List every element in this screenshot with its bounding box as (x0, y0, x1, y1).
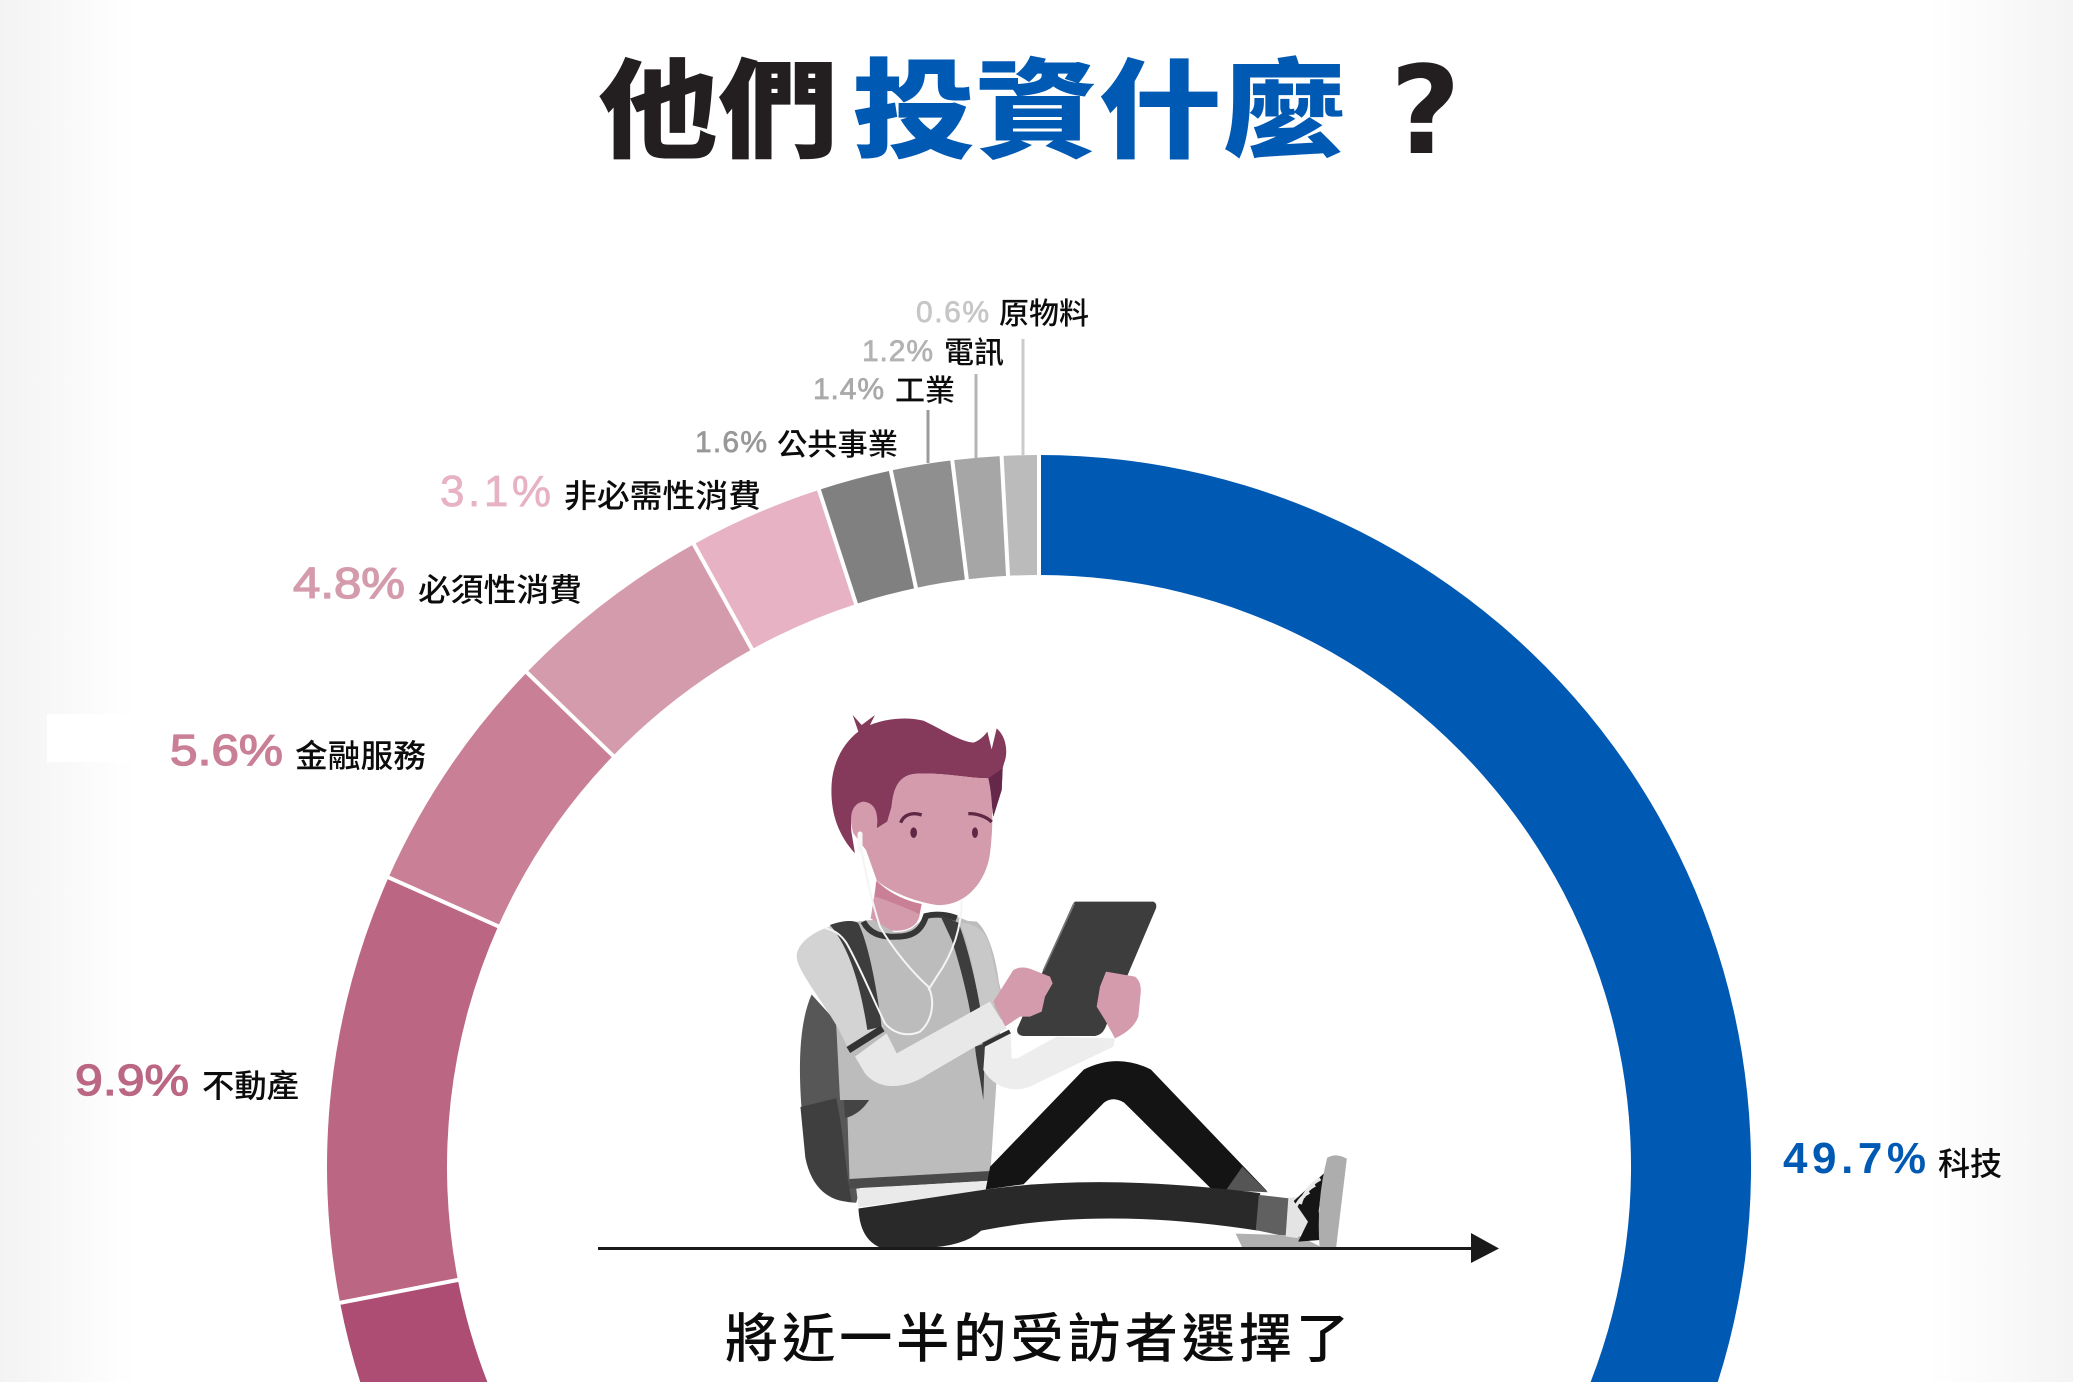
segment: industrials 1.4% (891, 460, 967, 588)
illustration: student with tablet (797, 715, 1347, 1248)
shoe (1236, 1155, 1347, 1248)
label: consumer staples 4.8% (293, 559, 582, 608)
title: ? (1390, 40, 1461, 182)
right arm (983, 1032, 1115, 1089)
segment: real estate 9.9% (327, 877, 498, 1303)
lower body (800, 917, 1347, 1248)
label: materials 0.6% (916, 296, 1089, 331)
title (598, 40, 1461, 182)
hands (993, 967, 1141, 1038)
hair (831, 715, 1006, 853)
label: financials 5.6% (170, 726, 426, 775)
arrow (598, 1233, 1499, 1263)
label: real estate 9.9% (75, 1056, 299, 1105)
leader lines (928, 339, 1023, 463)
donut chart (327, 452, 1751, 1382)
segment: consumer discretionary 3.1% (694, 490, 856, 649)
label: materials 0.6%: 原物料 (999, 298, 1089, 331)
label: industrials 1.4% (813, 373, 955, 408)
left forearm (855, 1002, 1007, 1086)
label: telecom 1.2%: 1.2% (862, 335, 933, 368)
earphones (825, 834, 962, 1034)
label: industrials 1.4%: 工業 (895, 375, 955, 408)
label: technology 49.7%: 49.7% (1783, 1134, 1926, 1183)
label: financials 5.6%: 5.6% (170, 726, 283, 775)
shirt lower (829, 917, 1001, 1181)
left sleeve (797, 927, 883, 1050)
label: consumer staples 4.8%: 4.8% (293, 559, 405, 608)
title: 他們 (598, 51, 838, 172)
segment: telecom 1.2% (952, 456, 1008, 579)
label: consumer discretionary 3.1% (440, 467, 761, 516)
right shoulder (960, 923, 1002, 1017)
label: utilities 1.6% (695, 426, 898, 462)
label: telecom 1.2% (862, 335, 1004, 370)
shirt upper (830, 917, 1003, 1100)
segment: materials 0.6% (1002, 455, 1039, 576)
label: industrials 1.4%: 1.4% (813, 373, 884, 406)
label: utilities 1.6%: 1.6% (695, 426, 767, 459)
back leg (986, 1061, 1268, 1192)
backpack (800, 994, 887, 1203)
segment: technology 49.7% (1039, 455, 1751, 1382)
label: consumer staples 4.8%: 必須性消費 (418, 572, 582, 608)
label: technology 49.7% (1783, 1134, 2002, 1183)
sleeve band (848, 1028, 883, 1050)
neck (871, 880, 922, 931)
label: consumer discretionary 3.1%: 非必需性消費 (564, 478, 761, 514)
label: consumer discretionary 3.1%: 3.1% (440, 467, 551, 516)
face (851, 774, 992, 905)
backpack straps (830, 915, 985, 1100)
eyes and brows (901, 814, 992, 838)
hem and undershirt (850, 1171, 990, 1207)
label: telecom 1.2%: 電訊 (944, 337, 1004, 370)
segment: financials 5.6% (389, 672, 613, 926)
title: 投資什麼 (852, 51, 1345, 172)
label: materials 0.6%: 0.6% (916, 296, 989, 329)
label: real estate 9.9%: 9.9% (75, 1056, 189, 1105)
upper body (797, 715, 1156, 1100)
caption: 將近一半的受訪者選擇了 (725, 1310, 1349, 1369)
label: real estate 9.9%: 不動產 (202, 1068, 299, 1104)
label: financials 5.6%: 金融服務 (295, 738, 426, 774)
tablet (1017, 902, 1156, 1036)
label: technology 49.7%: 科技 (1938, 1146, 2002, 1182)
segment: consumer staples 4.8% (527, 544, 752, 756)
segment: darkest pink (340, 1280, 487, 1382)
label: utilities 1.6%: 公共事業 (777, 429, 898, 462)
collar (863, 915, 957, 937)
segment: utilities 1.6% (819, 471, 916, 604)
front leg (858, 1182, 1289, 1248)
